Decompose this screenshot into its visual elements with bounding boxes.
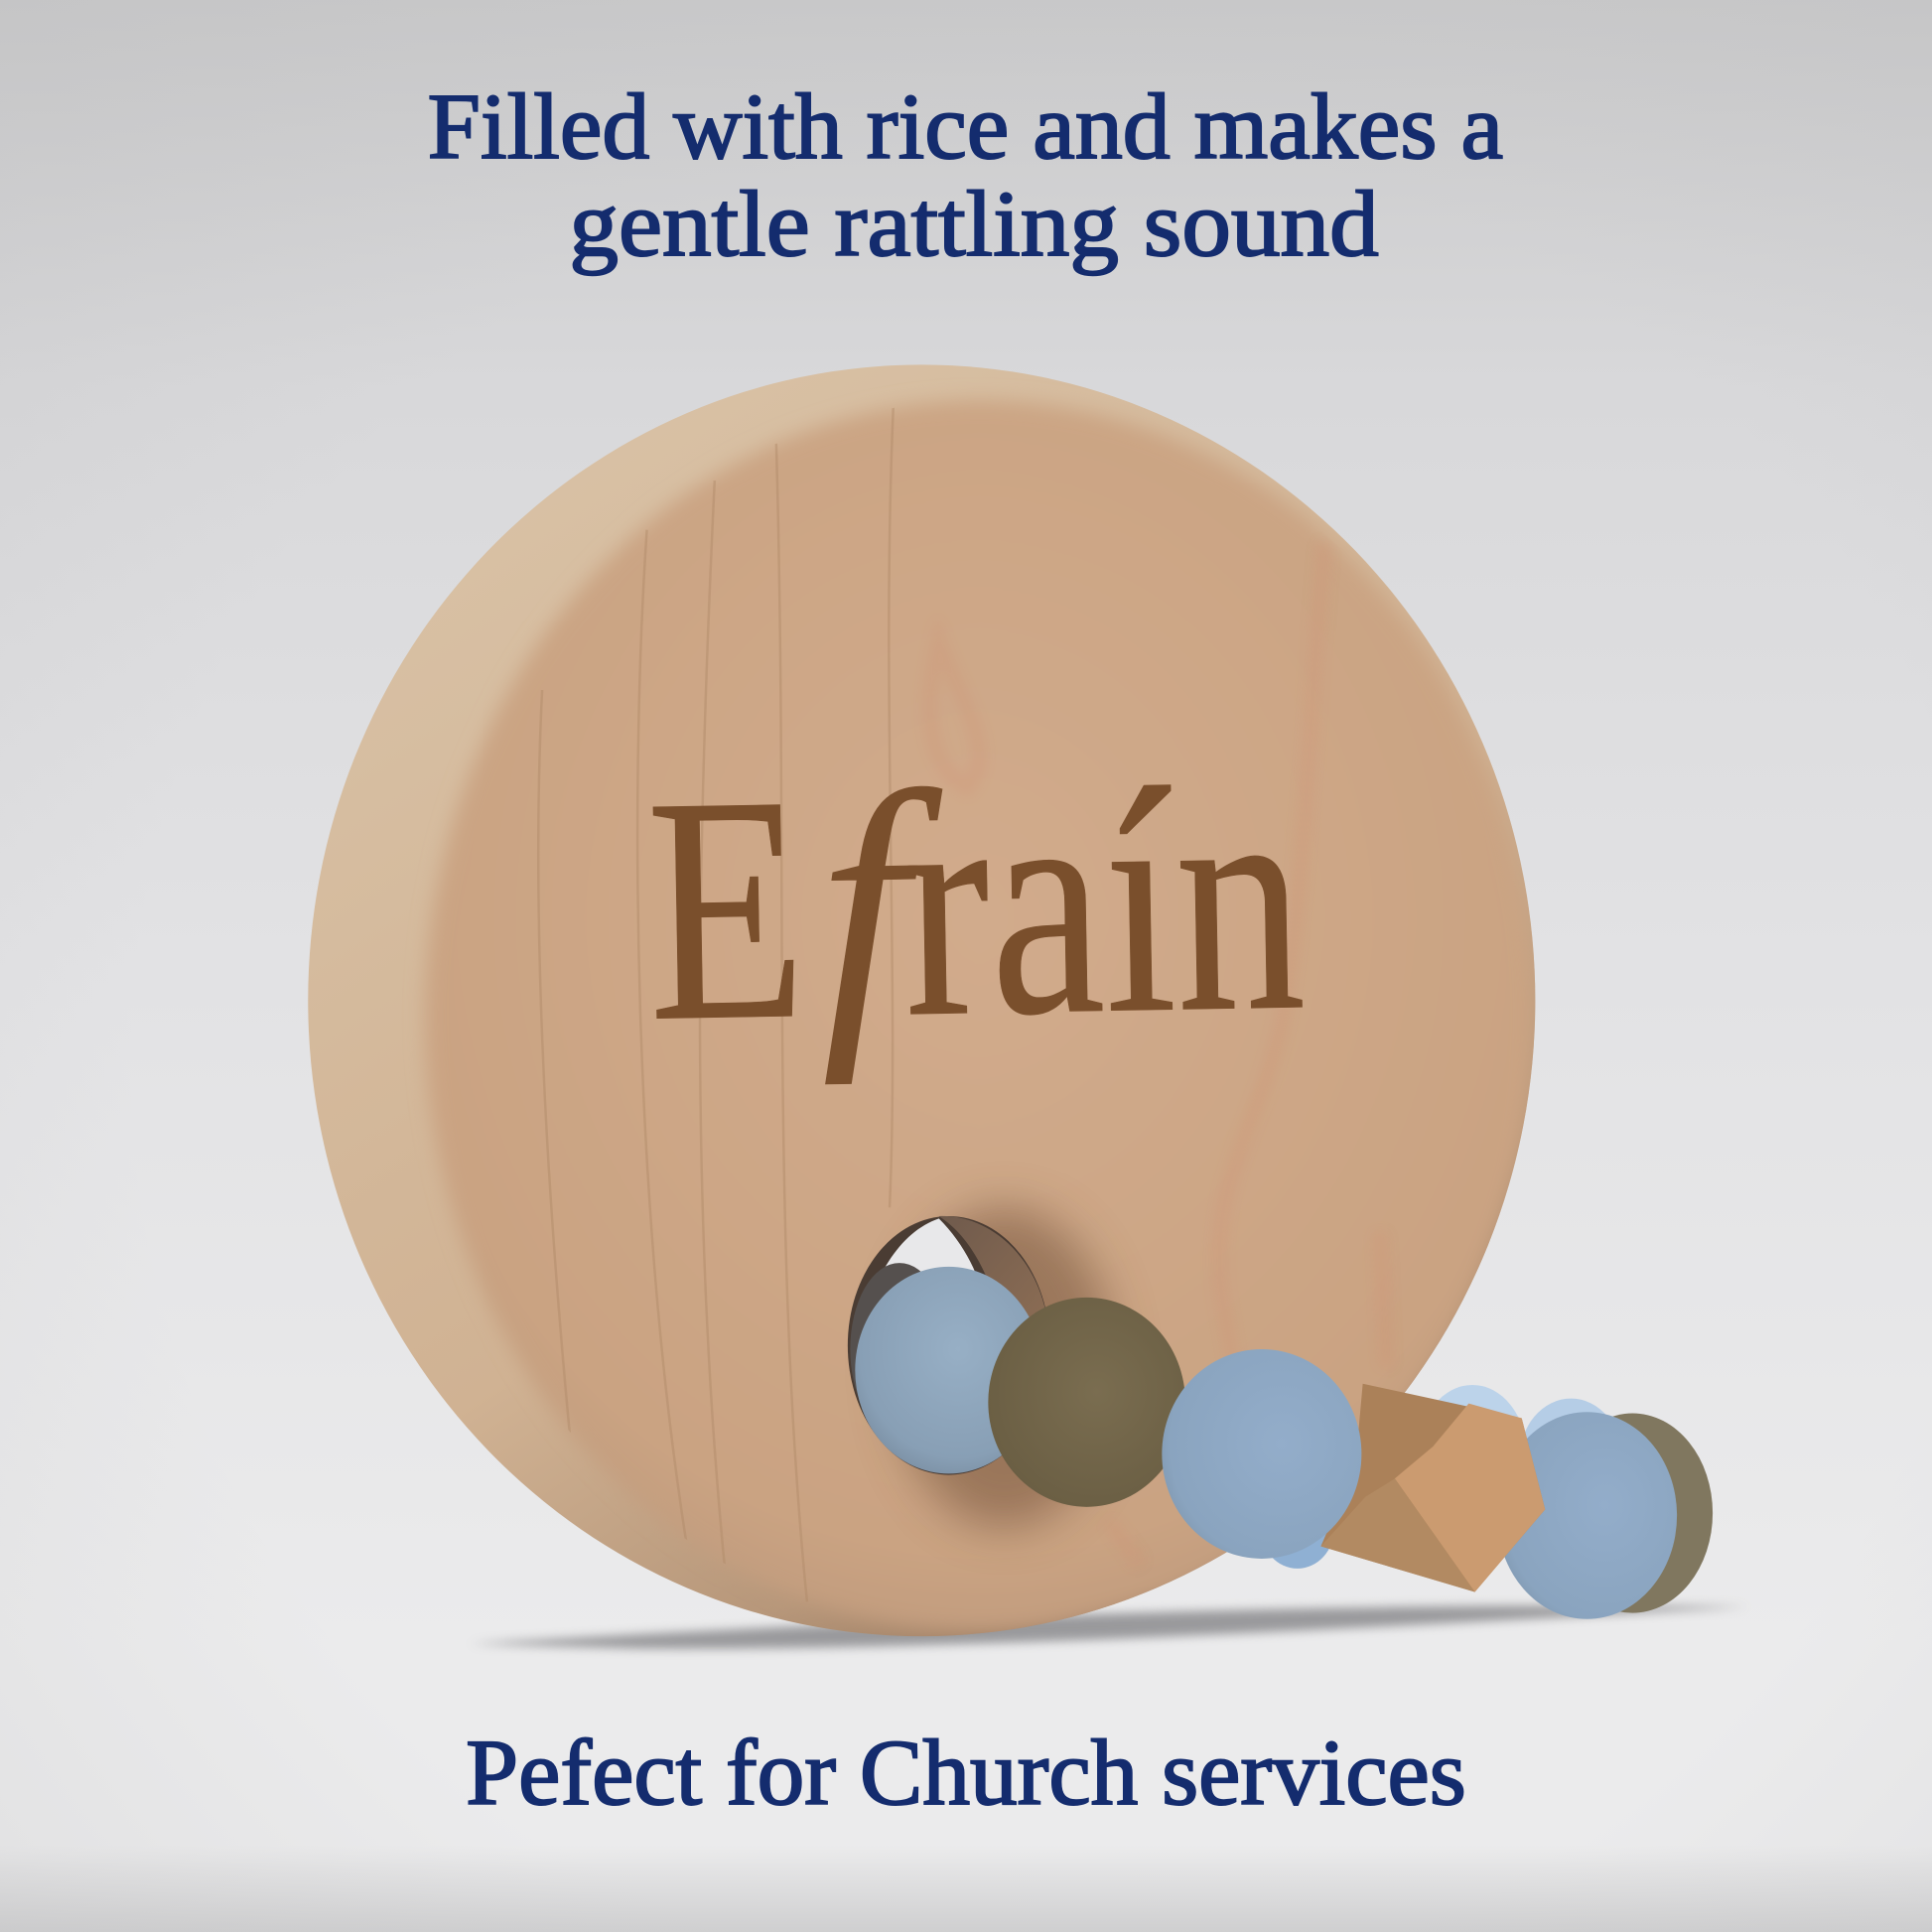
heading: top [428,75,1503,276]
wooden disc [308,364,1535,1636]
heading: bottom: Pefect for Church services [466,1722,1466,1825]
bead cord [850,1263,1677,1619]
logo: Efraín: raín [900,720,1308,1084]
logo: Efraín: E [644,729,808,1089]
olive bead [988,1298,1185,1507]
hole inner wall [939,1216,1049,1349]
heading: top: gentle rattling sound [569,173,1379,276]
hole shadow [894,1207,1115,1528]
dark rear bead [850,1263,949,1436]
logo: Efraín: f [816,727,951,1086]
hole [848,1216,1049,1475]
wooden hexagon bead [1320,1384,1545,1591]
blue bead right [1497,1412,1677,1619]
floor shadow [469,1605,1749,1649]
blue bead center [1162,1349,1361,1559]
blue bead in hole [855,1267,1042,1473]
hole opening [878,1218,981,1288]
wood grain [537,408,895,1601]
background beads [1261,1385,1713,1613]
disc side edge [308,364,1535,1636]
disc face [425,400,1534,1632]
heading: top: Filled with rice and makes a [428,75,1503,179]
